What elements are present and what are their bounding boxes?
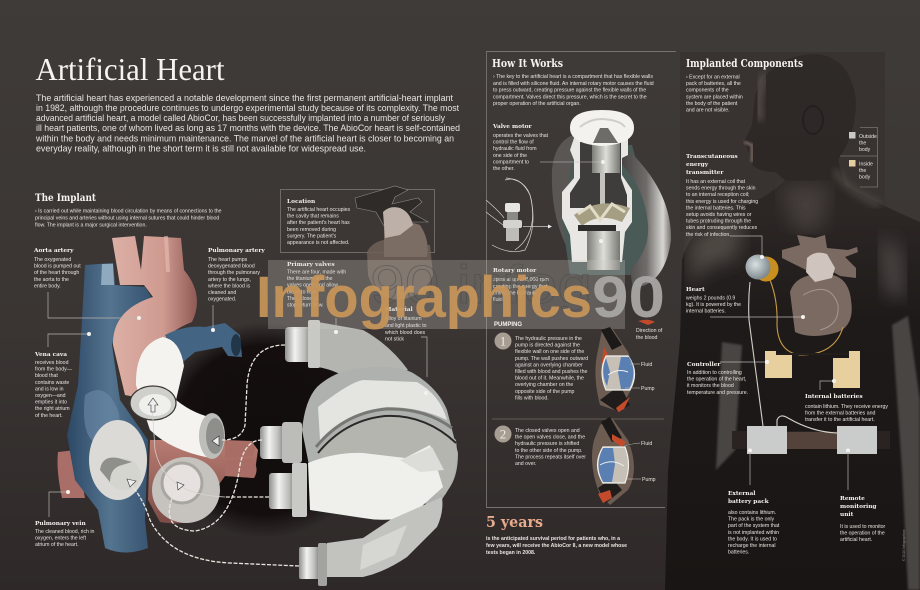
label: material: Alloy of titanium bbox=[385, 316, 422, 322]
credit: © 2010 Infographics bbox=[902, 529, 906, 561]
bottom connector bbox=[299, 543, 327, 586]
step 1: flexible wall on one side of the bbox=[515, 349, 584, 355]
label: material: not stick bbox=[385, 336, 404, 342]
label: transcutaneous energy transmitter bbox=[686, 154, 758, 238]
label: pulmonary artery: where the blood is bbox=[208, 283, 251, 289]
step 2: the open valves close, and the bbox=[515, 435, 585, 441]
upper ring bbox=[130, 386, 176, 420]
diagram: pump state 1: Pump bbox=[641, 386, 655, 392]
label: external battery pack bbox=[728, 491, 780, 556]
label: internal batteries bbox=[805, 379, 888, 423]
label: vena cava: and is low in bbox=[35, 386, 64, 392]
label: pulmonary artery: oxygenated. bbox=[208, 297, 236, 303]
label: pulmonary vein: Pulmonary vein bbox=[35, 521, 86, 527]
label: transcutaneous energy transmitter: sends energy through the skin bbox=[686, 186, 756, 192]
label: external battery pack: recharge the internal bbox=[728, 543, 776, 549]
how it works description: compartment. Valves direct this pressure, which is the secret to the bbox=[493, 94, 647, 100]
label: valve motor: the other. bbox=[493, 166, 515, 172]
how it works description: proper operation of the artificial organ. bbox=[493, 101, 581, 107]
label: external battery pack: is not implanted within bbox=[728, 530, 779, 536]
leader: transmitter bbox=[730, 236, 764, 259]
implant description: › Is carried out while maintaining blood circulation by means of connections to the bbox=[35, 208, 222, 214]
label: external battery pack: part of the system that bbox=[728, 523, 780, 529]
cap bbox=[570, 110, 634, 146]
label: remote monitoring unit bbox=[840, 496, 886, 543]
illustration: heart with connectors bbox=[58, 236, 258, 552]
illustration: wires bbox=[749, 280, 843, 426]
label: aorta artery: entire body. bbox=[34, 283, 61, 289]
lower motor bbox=[587, 231, 620, 270]
how it works description: to press outward, creating pressure against the flexible walls of the bbox=[493, 88, 646, 94]
label: external battery pack: also contains lithium. bbox=[728, 510, 776, 516]
component: internal battery bbox=[833, 351, 860, 388]
label: controller: Controller bbox=[687, 362, 721, 368]
watermark ghost lettering: 90 infog bbox=[370, 255, 592, 315]
label: pulmonary artery: Pulmonary artery bbox=[208, 248, 265, 254]
label: remote monitoring unit: monitoring bbox=[840, 504, 876, 510]
label: controller bbox=[687, 360, 769, 396]
outer shell right bbox=[617, 147, 671, 288]
5 years description: few years, will receive the AbioCor II, a new model whose bbox=[486, 543, 627, 549]
label: primary valves: the titanium and the bbox=[287, 276, 333, 282]
label: internal batteries: Internal batteries bbox=[805, 394, 863, 400]
diagram: pump state 2: Pump bbox=[642, 477, 656, 483]
legend: direction of the blood: the blood bbox=[636, 335, 657, 341]
label: external battery pack: battery pack bbox=[728, 499, 770, 505]
step 1 bbox=[494, 332, 588, 401]
label: rotary motor bbox=[493, 268, 549, 303]
intro text: The artificial heart has experienced a notable development since the first permanent artificial-heart implant bbox=[36, 93, 453, 103]
label: material: Material bbox=[385, 307, 414, 313]
label: transcutaneous energy transmitter: this energy is used for charging bbox=[686, 199, 758, 205]
label: primary valves: Primary valves bbox=[287, 262, 335, 268]
white bag bbox=[308, 445, 443, 520]
panel: location: been removed during bbox=[287, 227, 336, 233]
label: transcutaneous energy transmitter: the risk of infection. bbox=[686, 232, 731, 238]
body bbox=[562, 135, 632, 262]
label: heart: Heart bbox=[686, 287, 705, 293]
aorta bbox=[112, 236, 197, 398]
label: vena cava: contains waste bbox=[35, 380, 69, 386]
heading: implanted components: Implanted Components bbox=[686, 56, 803, 70]
label: vena cava: blood that bbox=[35, 373, 58, 379]
label: transcutaneous energy transmitter: It has an external coil that bbox=[686, 179, 746, 185]
implanted components description: the body of the patient bbox=[686, 101, 738, 107]
label: transcutaneous energy transmitter: transmitter bbox=[686, 170, 724, 176]
label: aorta artery: Aorta artery bbox=[33, 248, 74, 254]
label: primary valves: blood to flow. bbox=[287, 289, 317, 295]
label: valve motor: Valve motor bbox=[492, 124, 533, 130]
label: pulmonary artery: The heart pumps bbox=[208, 257, 248, 263]
label: vena cava: oxygen—and bbox=[35, 393, 66, 399]
step 1: against an overlying chamber bbox=[515, 362, 583, 368]
component: controller bbox=[765, 351, 792, 378]
label: vena cava: of the heart. bbox=[35, 413, 63, 419]
label: pulmonary artery: cleaned and bbox=[208, 290, 236, 296]
label: primary valves: stop return flow. bbox=[287, 302, 324, 308]
step 2: The closed valves open and bbox=[515, 428, 580, 434]
diagram: pump state 1: Fluid bbox=[641, 362, 652, 368]
dark backdrop behind device bbox=[153, 322, 377, 538]
intro text bbox=[35, 93, 460, 154]
label: vena cava: receives blood bbox=[35, 360, 69, 366]
intro text: ill heart patients, one of whom lived as long as 17 months with the device. The AbioCor heart is self-contained bbox=[36, 123, 460, 133]
panel: how it works frame bbox=[486, 52, 676, 508]
label: primary valves: valves open and allow bbox=[287, 283, 338, 289]
label: material: which blood does bbox=[385, 330, 425, 336]
label: aorta artery: the aorta to the bbox=[34, 277, 69, 283]
teal interior bbox=[562, 145, 655, 275]
legend: outside and inside the body: Inside bbox=[859, 162, 873, 168]
belt bbox=[732, 431, 890, 449]
right ring bbox=[199, 413, 225, 459]
white tube bbox=[136, 337, 215, 458]
step 2: The process repeats itself over bbox=[515, 454, 586, 460]
label: external battery pack: the body. It is used to bbox=[728, 536, 777, 542]
label: remote monitoring unit: It is used to monitor bbox=[840, 524, 886, 530]
5 years description: is the anticipated survival period for patients who, in a bbox=[486, 536, 620, 542]
label: aorta artery: of the heart through bbox=[34, 270, 79, 276]
panel: location: appearance is not affected. bbox=[287, 240, 350, 246]
intro text: within the body and needs minimum maintenance. The marvel of the artificial heart is closer to becoming an bbox=[35, 134, 454, 144]
label: pulmonary vein: oxygen, enters the left bbox=[35, 536, 87, 542]
label: controller: the operation of the heart, bbox=[687, 377, 746, 383]
top motor bbox=[592, 140, 620, 173]
illustration: pump cutaway bbox=[540, 110, 671, 288]
how it works description: › The key to the artificial heart is a compartment that has flexible walls bbox=[493, 74, 653, 80]
heading: how it works: How It Works bbox=[492, 56, 563, 70]
component: remote monitoring unit bbox=[837, 426, 877, 454]
label: primary valves: There are four, made with bbox=[287, 270, 346, 276]
label: external battery pack: The pack is the only bbox=[728, 517, 775, 523]
legend: direction of the blood: Direction of bbox=[636, 328, 663, 334]
intro text: everyday reality, although in the short term it is still not available for widespread use. bbox=[36, 144, 366, 154]
label: vena cava: the right atrium bbox=[35, 406, 70, 412]
label: rotary motor: spins at up to 8,000 rpm bbox=[493, 277, 549, 283]
legend: outside and inside the body: Outside bbox=[859, 134, 877, 140]
label: heart bbox=[686, 287, 805, 319]
label: rotary motor: drives the hydraulic bbox=[493, 290, 538, 296]
label: pulmonary vein bbox=[35, 490, 95, 548]
legend: outside and inside the body: the bbox=[859, 141, 866, 147]
step 1: fills with blood. bbox=[515, 395, 549, 401]
watermark band bbox=[268, 260, 625, 329]
heading: the implant: The Implant bbox=[35, 192, 96, 204]
label: remote monitoring unit: the operation of the bbox=[840, 531, 885, 537]
step 1: blood out of it. Meanwhile, the bbox=[515, 376, 584, 382]
label: heart: weighs 2 pounds (0.9 bbox=[686, 296, 735, 302]
gear bbox=[574, 203, 630, 226]
label: vena cava: from the body— bbox=[35, 367, 73, 373]
lower-left connector bbox=[269, 463, 307, 517]
label: transcutaneous energy transmitter: Transcutaneous bbox=[686, 154, 738, 160]
label: internal batteries: contain lithium. They receive energy bbox=[805, 404, 888, 410]
legend: outside and inside the body bbox=[840, 128, 878, 187]
label: internal batteries: transfer it to the artificial heart. bbox=[805, 417, 875, 423]
heading: pumping: PUMPING bbox=[494, 322, 522, 328]
diagram: pump state 2 bbox=[592, 417, 656, 505]
right disc bbox=[152, 457, 220, 523]
dome black stripe bbox=[318, 416, 456, 453]
step 1: The hydraulic pressure in the bbox=[515, 336, 582, 342]
label: rotary motor: Rotary motor bbox=[493, 268, 537, 274]
label: transcutaneous energy transmitter: the internal batteries. This bbox=[686, 205, 746, 211]
label: pulmonary artery: artery to the lungs, bbox=[208, 277, 251, 283]
label: rotary motor: creating the energy that bbox=[493, 284, 548, 290]
label: primary valves bbox=[287, 262, 346, 334]
implanted components description bbox=[686, 74, 743, 114]
diagram: pump state 2: Fluid bbox=[641, 441, 652, 447]
upper connector bbox=[285, 320, 320, 368]
legend: outside and inside the body: the bbox=[859, 168, 866, 174]
diagram: pump state 1 bbox=[595, 327, 655, 412]
panel: implanted components backdrop bbox=[680, 52, 885, 232]
label: pulmonary artery: through the pulmonary bbox=[208, 270, 260, 276]
label: aorta artery: blood is pumped out bbox=[34, 264, 81, 270]
label: remote monitoring unit: unit bbox=[840, 512, 854, 518]
label: material: and light plastic to bbox=[385, 323, 427, 329]
label: transcutaneous energy transmitter: skin and consequently reduces bbox=[686, 225, 758, 231]
step 1: pump. The wall pushes outward bbox=[515, 356, 588, 362]
implant description: flow. The implant is a major surgical intervention. bbox=[35, 222, 147, 228]
human body silhouette bbox=[665, 54, 920, 590]
step 2 bbox=[494, 426, 586, 467]
implant description: principal veins and arteries without using internal sutures that could hinder blood bbox=[35, 216, 219, 222]
label: transcutaneous energy transmitter: tubes protruding through the bbox=[686, 219, 751, 225]
step 1: overlying chamber on the bbox=[515, 382, 573, 388]
panel: location: Location bbox=[287, 199, 316, 205]
illustration: abiocor artificial heart device bbox=[260, 320, 458, 586]
label: remote monitoring unit: artificial heart. bbox=[840, 537, 872, 543]
panel: location: surgery. The patient's bbox=[287, 233, 337, 239]
divider bbox=[492, 418, 664, 420]
legend: outside and inside the body: body bbox=[859, 175, 871, 181]
pulmonary artery bbox=[165, 323, 242, 362]
label: pulmonary vein: The cleaned blood, rich in bbox=[35, 529, 95, 535]
label: valve motor: control the flow of bbox=[493, 140, 534, 146]
label: transcutaneous energy transmitter: energy bbox=[686, 162, 709, 168]
panel: location: The artificial heart occupies bbox=[287, 207, 351, 213]
step 1: pump is directed against the bbox=[515, 343, 580, 349]
upper tube bbox=[318, 322, 408, 385]
label: valve motor bbox=[492, 124, 549, 172]
lower heart bbox=[148, 440, 258, 523]
implant description bbox=[35, 208, 222, 228]
label: valve motor: hydraulic fluid from bbox=[493, 146, 537, 152]
external wire bbox=[777, 416, 837, 433]
label: material bbox=[385, 307, 428, 395]
illustration: implanted heart bbox=[782, 235, 858, 336]
label: remote monitoring unit: Remote bbox=[840, 496, 865, 502]
implanted components description: › Except for an external bbox=[686, 74, 740, 80]
label: valve motor: compartment to bbox=[493, 159, 529, 165]
blood flow paths bbox=[127, 345, 299, 566]
panel: location: after the patient's heart has bbox=[287, 220, 350, 226]
step 2: to the other side of the pump. bbox=[515, 448, 582, 454]
5 years description bbox=[486, 536, 627, 556]
step 1: 1 bbox=[500, 334, 506, 348]
label: primary valves: They close to bbox=[287, 296, 318, 302]
watermark text: 90 bbox=[592, 265, 665, 330]
middle connector bbox=[260, 422, 302, 463]
step 2: hydraulic pressure is shifted bbox=[515, 441, 579, 447]
label: valve motor: one side of the bbox=[493, 153, 527, 159]
dome glass band bbox=[318, 380, 447, 440]
implanted components description: components of the bbox=[686, 88, 729, 94]
label: controller: it monitors the blood bbox=[687, 383, 734, 389]
step 2: and over. bbox=[515, 461, 536, 467]
step 2: 2 bbox=[500, 426, 506, 442]
watermark text: Infographics bbox=[256, 265, 592, 330]
left pulmonary veins bbox=[58, 450, 85, 498]
stat: 5 years: 5 years bbox=[486, 513, 543, 531]
label: controller: temperature and pressure. bbox=[687, 390, 748, 396]
panel: location: the cavity that remains bbox=[287, 214, 339, 220]
dome interior bbox=[320, 415, 457, 495]
step 1: filled with blood and pushes the bbox=[515, 369, 588, 375]
legend: outside and inside the body: body bbox=[859, 147, 871, 153]
how it works description bbox=[493, 74, 654, 107]
panel: location bbox=[280, 186, 434, 300]
5 years description: tests began in 2008. bbox=[486, 550, 536, 556]
component: external battery pack bbox=[747, 426, 787, 454]
label: heart: kg). It is powered by the bbox=[686, 302, 741, 308]
label: pulmonary artery: deoxygenated blood bbox=[208, 264, 255, 270]
label: vena cava bbox=[34, 332, 91, 419]
left disc bbox=[89, 420, 147, 500]
outer shell left bbox=[552, 132, 590, 257]
label: heart: internal batteries. bbox=[686, 309, 726, 315]
label: transcutaneous energy transmitter: setup avoids having wires or bbox=[686, 212, 752, 218]
lower tube bbox=[327, 497, 442, 577]
vena cava bbox=[67, 263, 153, 552]
label: transcutaneous energy transmitter: to an internal reception coil; bbox=[686, 192, 749, 198]
step 1: opposite side of the pump bbox=[515, 389, 575, 395]
title: Artificial Heart bbox=[36, 51, 225, 87]
dome outer bbox=[302, 367, 458, 507]
label: external battery pack: batteries. bbox=[728, 550, 749, 556]
label: internal batteries: from the external batteries and bbox=[805, 411, 875, 417]
implanted components description: pack of batteries, all the bbox=[686, 81, 741, 87]
how it works description: and is filled with silicone fluid. An internal rotary motor causes the fluid bbox=[493, 81, 654, 87]
label: pulmonary vein: atrium of the heart. bbox=[35, 542, 79, 548]
label: pulmonary artery bbox=[208, 248, 265, 332]
label: vena cava: Vena cava bbox=[34, 352, 67, 358]
label: rotary motor: fluid. bbox=[493, 297, 504, 303]
intro text: in 1982, although the procedure continues to undergo experimental study because of its complexity. The most bbox=[36, 103, 459, 113]
icon: heart in chest bbox=[355, 186, 433, 300]
label: valve motor: operates the valves that bbox=[493, 133, 549, 139]
icon: motor in hand bbox=[486, 178, 552, 252]
icon: transcutaneous coil bbox=[746, 254, 778, 282]
label: aorta artery: The oxygenated bbox=[34, 257, 71, 263]
implanted components description: system are placed within bbox=[686, 94, 743, 100]
label: aorta artery bbox=[33, 248, 141, 320]
label: external battery pack: External bbox=[728, 491, 756, 497]
implanted components description: and are not visible. bbox=[686, 108, 730, 114]
intro text: advanced artificial heart, a model called AbioCor, has been successfully implanted into a number of seriously bbox=[36, 113, 445, 123]
label: controller: In addition to controlling bbox=[687, 370, 742, 376]
label: vena cava: empties it into bbox=[35, 400, 67, 406]
legend: direction of the blood bbox=[636, 320, 663, 341]
